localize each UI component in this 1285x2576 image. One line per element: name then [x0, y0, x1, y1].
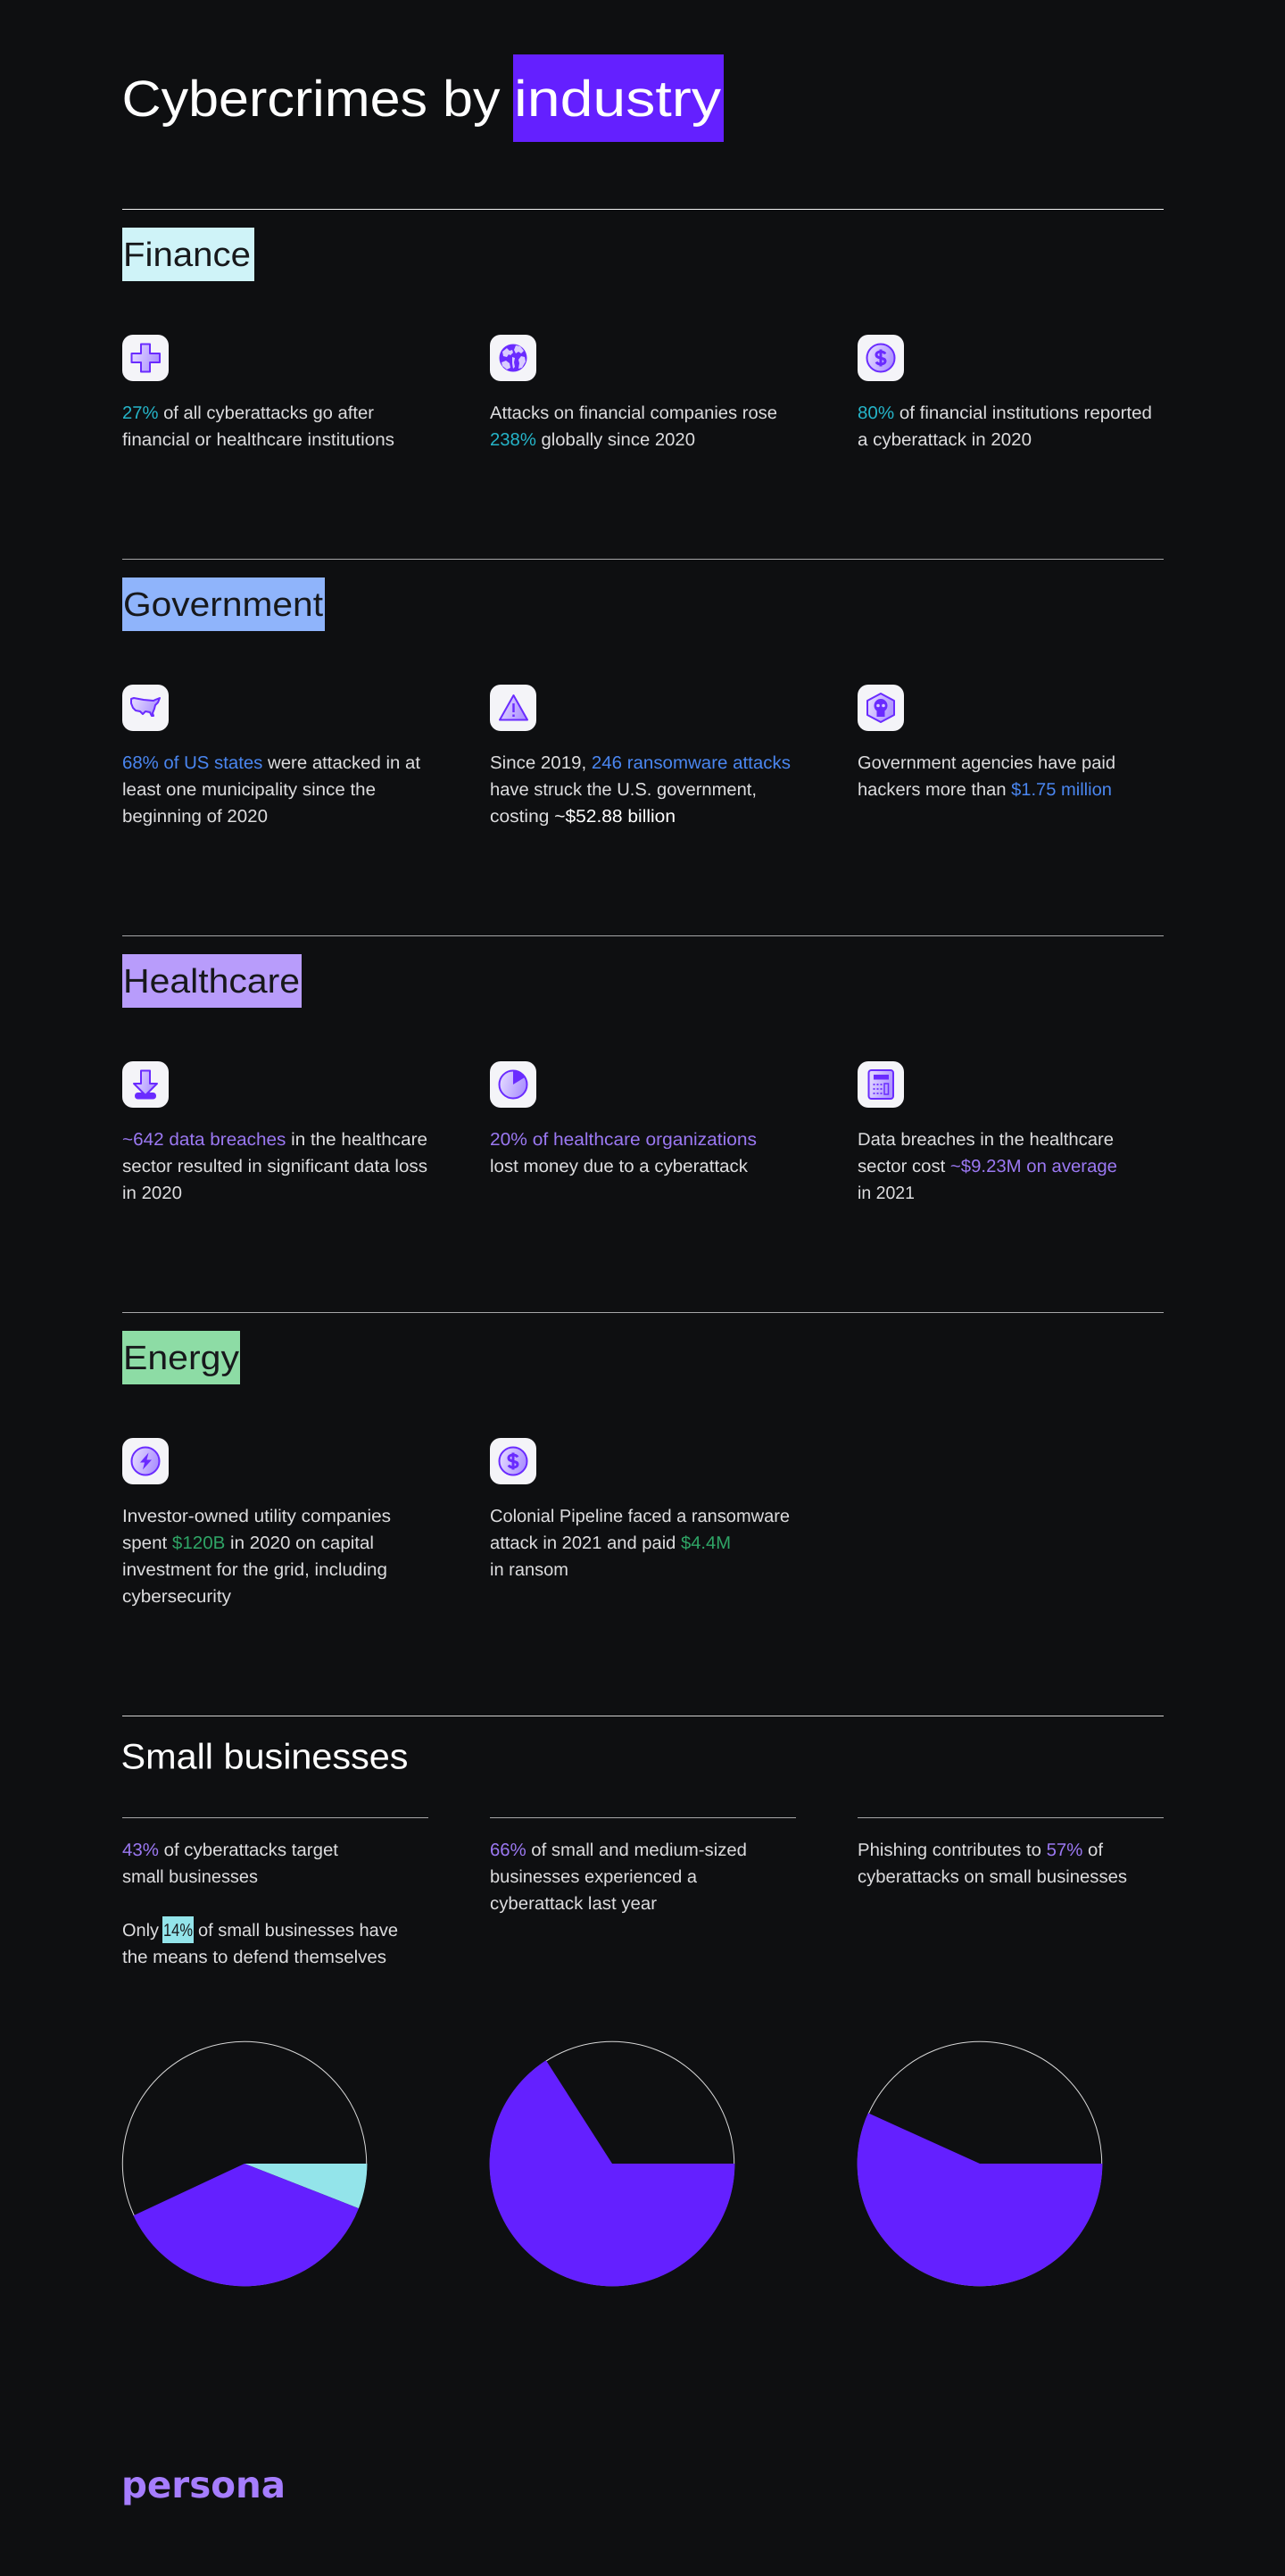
- text: 66% stat: 66% of small and medium-sized: [490, 1841, 747, 1860]
- stat: $9.23M average cost: in 2021: [858, 1184, 915, 1203]
- stat: 80% of institutions: a cyberattack in 2020: [858, 430, 1032, 450]
- stat: $1.75 million paid: hackers more than $1.75 million: [858, 780, 1112, 800]
- heading: small businesses: Small businesses: [121, 1737, 409, 1776]
- text: small business stats: 43% of cyberattacks target: [122, 1841, 338, 1860]
- stat: 80% of institutions: [858, 335, 1152, 450]
- stat: $1.75 million paid: [858, 685, 1115, 800]
- text: 66% stat: cyberattack last year: [490, 1894, 657, 1914]
- stat: 20% of organizations: [490, 1061, 757, 1176]
- stat: $1.75 million paid: Government agencies have paid: [858, 753, 1115, 773]
- title: [121, 54, 724, 142]
- column: 57%: [858, 1817, 1164, 2286]
- text: small business stats: Only: [122, 1921, 159, 1940]
- text: 66% stat: businesses experienced a: [490, 1867, 698, 1887]
- stat: 246 ransomware attacks: have struck the U.S. government,: [490, 780, 757, 800]
- heading: government: Government: [123, 586, 323, 624]
- panel: government: [122, 559, 1164, 827]
- text: small business stats: of small businesses have: [198, 1921, 398, 1940]
- column: 43% and 14%: [122, 1817, 428, 2286]
- stat: $120B investment: Investor-owned utility companies: [122, 1507, 391, 1526]
- text: small business stats: the means to defend themselves: [122, 1948, 386, 1967]
- stat: 246 ransomware attacks: Since 2019, 246 ransomware attacks: [490, 753, 791, 773]
- text: small business stats: [122, 1841, 398, 1967]
- text: small business stats: 14%: [163, 1921, 193, 1940]
- stat: $120B investment: spent $120B in 2020 on capital: [122, 1533, 374, 1553]
- icon: globe: [490, 335, 536, 381]
- stat: Colonial Pipeline ransom: in ransom: [490, 1560, 568, 1580]
- icon: dollar coin: [490, 1438, 536, 1484]
- stat: 642 data breaches: in 2020: [122, 1184, 182, 1203]
- stat: 642 data breaches: [122, 1061, 427, 1203]
- text: 57% stat: Phishing contributes to 57% of: [858, 1841, 1103, 1860]
- pie chart: 43% and 14%: [122, 2041, 367, 2286]
- stat: 68% of US states: 68% of US states were attacked in at: [122, 753, 420, 773]
- icon: pie chart: [490, 1061, 536, 1108]
- stat: 27% of cyberattacks: financial or healthcare institutions: [122, 430, 394, 450]
- stat: 642 data breaches: sector resulted in significant data loss: [122, 1157, 427, 1176]
- stat: 238% rise: Attacks on financial companies rose: [490, 403, 777, 423]
- icon: calculator: [858, 1061, 904, 1108]
- stat: 238% rise: [490, 335, 777, 450]
- stat: $9.23M average cost: sector cost ~$9.23M on average: [858, 1157, 1117, 1176]
- stat: Colonial Pipeline ransom: [490, 1438, 790, 1580]
- heading: healthcare: Healthcare: [123, 963, 300, 1001]
- icon: dollar coin: [858, 335, 904, 381]
- logo: persona: persona: [121, 2464, 286, 2506]
- stat: 246 ransomware attacks: costing ~$52.88 billion: [490, 807, 676, 827]
- heading: government: [122, 578, 325, 631]
- heading: healthcare: [122, 954, 302, 1008]
- icon: medical cross: [122, 335, 169, 381]
- stat: 20% of organizations: lost money due to a cyberattack: [490, 1157, 749, 1176]
- stat: 27% of cyberattacks: [122, 335, 394, 450]
- pie chart: 66%: [490, 2041, 734, 2286]
- stat: $9.23M average cost: [858, 1061, 1117, 1203]
- title: industry: [514, 71, 722, 128]
- text: 57% stat: cyberattacks on small businesses: [858, 1867, 1127, 1887]
- stat: $120B investment: cybersecurity: [122, 1587, 231, 1607]
- heading: energy: Energy: [123, 1340, 239, 1377]
- panel: energy: [122, 1312, 1164, 1607]
- icon: download arrow: [122, 1061, 169, 1108]
- stat: $9.23M average cost: Data breaches in the healthcare: [858, 1130, 1114, 1150]
- stat: 27% of cyberattacks: 27% of all cyberattacks go after: [122, 403, 374, 423]
- icon: warning triangle: [490, 685, 536, 731]
- stat: $120B investment: [122, 1438, 391, 1607]
- column: 66%: [490, 1817, 796, 2286]
- stat: 20% of organizations: 20% of healthcare organizations: [490, 1130, 757, 1150]
- heading: energy: [122, 1331, 240, 1384]
- pie chart: 57%: [858, 2041, 1102, 2286]
- panel: finance: [122, 209, 1164, 450]
- stat: 68% of US states: [122, 685, 420, 827]
- stat: 68% of US states: least one municipality since the: [122, 780, 376, 800]
- text: 66% stat: [490, 1841, 747, 1914]
- text: 57% stat: [858, 1841, 1127, 1887]
- title: Cybercrimes by: [121, 71, 501, 128]
- stat: 238% rise: 238% globally since 2020: [490, 430, 695, 450]
- text: small business stats: small businesses: [122, 1867, 258, 1887]
- stat: 68% of US states: beginning of 2020: [122, 807, 268, 827]
- stat: $120B investment: investment for the grid, including: [122, 1560, 387, 1580]
- icon: skull hexagon: [858, 685, 904, 731]
- stat: Colonial Pipeline ransom: Colonial Pipeline faced a ransomware: [490, 1507, 790, 1526]
- stat: 80% of institutions: 80% of financial institutions reported: [858, 403, 1152, 423]
- stat: Colonial Pipeline ransom: attack in 2021 and paid $4.4M: [490, 1533, 731, 1553]
- icon: US map: [122, 685, 169, 731]
- icon: lightning coin: [122, 1438, 169, 1484]
- panel: small businesses: [121, 1716, 1164, 2286]
- panel: healthcare: [122, 935, 1164, 1203]
- heading: finance: [122, 228, 254, 281]
- stat: 246 ransomware attacks: [490, 685, 791, 827]
- heading: finance: Finance: [123, 237, 251, 274]
- stat: 642 data breaches: ~642 data breaches in the healthcare: [122, 1130, 427, 1150]
